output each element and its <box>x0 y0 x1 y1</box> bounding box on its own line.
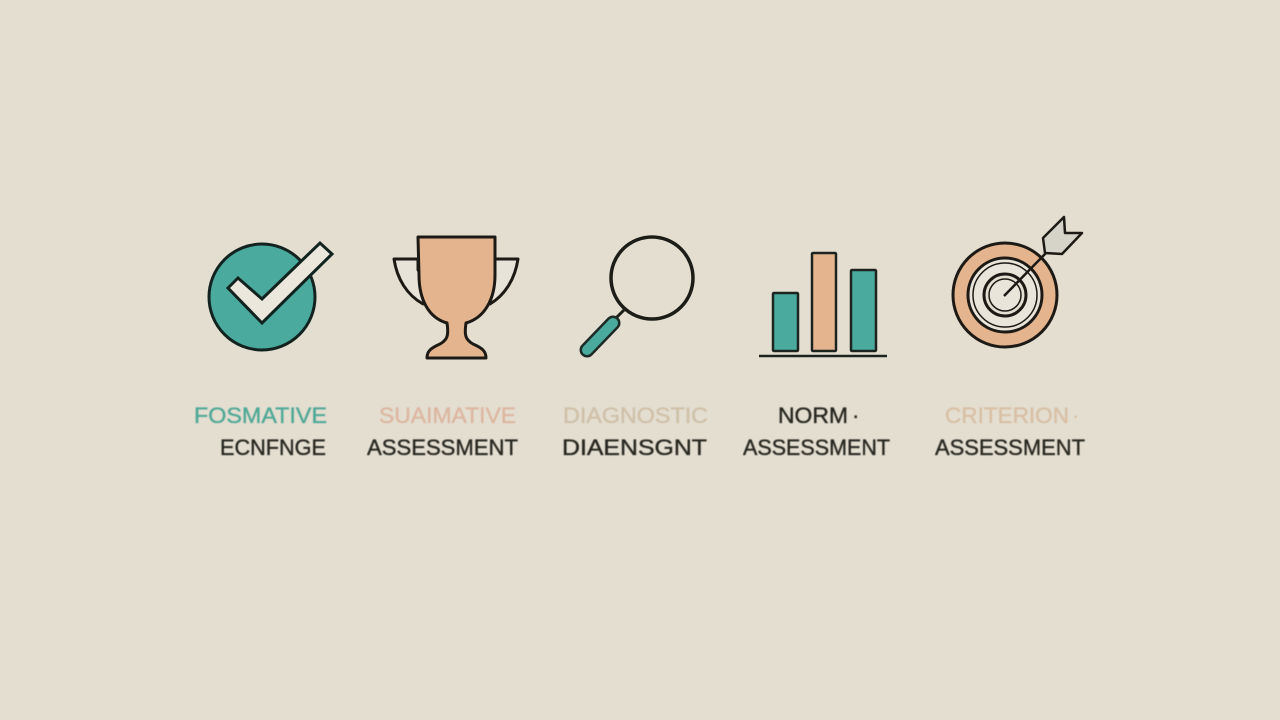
label: norm <box>743 403 890 460</box>
icon: check mark in teal circle <box>209 243 332 350</box>
label: norm: · <box>852 403 859 428</box>
label: diagnostic <box>562 403 708 460</box>
label: norm: NORM <box>778 403 848 428</box>
panel: norm-referenced <box>743 253 890 460</box>
label: summative <box>367 403 518 460</box>
label: diagnostic: DIAENSGNT <box>562 435 707 460</box>
label: criterion: ASSESSMENT <box>935 435 1085 460</box>
label: formative: ECNFNGE <box>220 435 326 460</box>
label: criterion <box>935 403 1085 460</box>
label: criterion: CRITERION <box>945 403 1069 428</box>
icon: magnifying glass <box>587 237 693 350</box>
icon: trophy <box>394 237 518 358</box>
label: formative <box>194 403 327 460</box>
icon: target with arrow <box>953 217 1082 347</box>
label: criterion: · <box>1072 403 1079 428</box>
panel: summative <box>367 237 518 460</box>
chart: bar chart icon <box>759 253 887 356</box>
panel: criterion <box>935 217 1085 460</box>
panel: diagnostic <box>562 237 708 460</box>
label: summative: ASSESSMENT <box>367 435 518 460</box>
label: summative: SUAIMATIVE <box>379 403 516 428</box>
label: diagnostic: DIAGNOSTIC <box>563 403 708 428</box>
label: norm: ASSESSMENT <box>743 435 890 460</box>
panel: formative <box>194 243 332 460</box>
label: formative: FOSMATIVE <box>194 403 327 428</box>
